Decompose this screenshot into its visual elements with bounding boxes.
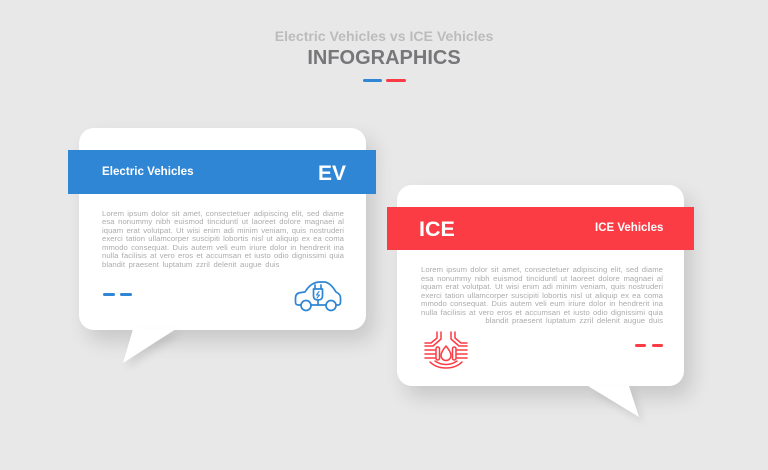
body text: blandit praesent luptatum zzril delenit augue duis	[485, 316, 663, 325]
body text: exerci tation ullamcorper suscipiti lobortis nisl ut aliquip ex ea coma	[421, 291, 663, 300]
dash one	[634, 344, 646, 347]
header band	[68, 150, 376, 194]
title block	[275, 28, 493, 82]
band abbreviation: ICE	[419, 216, 455, 240]
speech bubble tail	[588, 386, 642, 420]
dash one	[103, 292, 114, 296]
body text: mmodo consequat. Duis autem veli eum iriure dolor in hendrerit ina	[421, 299, 663, 308]
body text: iquam erat volutpat. Ut wisi enim adi minim veniam, quis nostruderi	[421, 282, 663, 291]
band label: ICE Vehicles	[595, 222, 663, 234]
speech bubble body	[79, 128, 366, 330]
body text: Lorem ipsum dolor sit amet, consectetuer adipiscing elit, sed diame	[102, 208, 344, 218]
body text: iquam erat volutpat. Ut wisi enim adi minim veniam, quis nostruderi	[102, 226, 344, 235]
body text: exerci tation ullamcorper suscipiti lobortis nisl ut aliquip ex ea coma	[102, 234, 344, 243]
body text: mmodo consequat. Duis autem veli eum iriure dolor in hendrerit ina	[102, 243, 344, 252]
subtitle: Electric Vehicles vs ICE Vehicles	[275, 28, 493, 44]
icon: oil pipe with drop	[424, 331, 468, 369]
body text: esa nonummy nibh euismod tinciduntl ut laoreet dolore magnaei al	[421, 274, 663, 283]
accent dash: red	[386, 79, 406, 82]
header band	[387, 207, 694, 250]
dash two	[120, 292, 132, 296]
icon: electric car	[294, 281, 342, 312]
panel: ICE vehicles	[387, 185, 699, 420]
body text: esa nonummy nibh euismod tinciduntl ut laoreet dolore magnaei al	[102, 217, 344, 226]
accent dash: blue	[363, 79, 382, 82]
panel: electric vehicles	[68, 128, 381, 365]
dashes	[635, 344, 663, 347]
speech bubble tail	[123, 330, 174, 365]
body text: nulla facilisis at vero eros et accumsan et iusto odio dignissimi quia	[102, 251, 344, 260]
dashes	[103, 293, 132, 296]
dash two	[652, 344, 663, 347]
body text: blandit praesent luptatum zzril delenit augue duis	[102, 260, 280, 269]
band abbreviation: EV	[318, 162, 346, 184]
body text: Lorem ipsum dolor sit amet, consectetuer adipiscing elit, sed diame	[421, 265, 663, 274]
body text: nulla facilisis at vero eros et accumsan et iusto odio dignissimi quia	[421, 308, 663, 317]
body text	[102, 208, 344, 269]
band label: Electric Vehicles	[102, 165, 194, 178]
heading: INFOGRAPHICS	[307, 47, 461, 69]
body text	[421, 265, 663, 325]
speech bubble body	[397, 185, 684, 386]
